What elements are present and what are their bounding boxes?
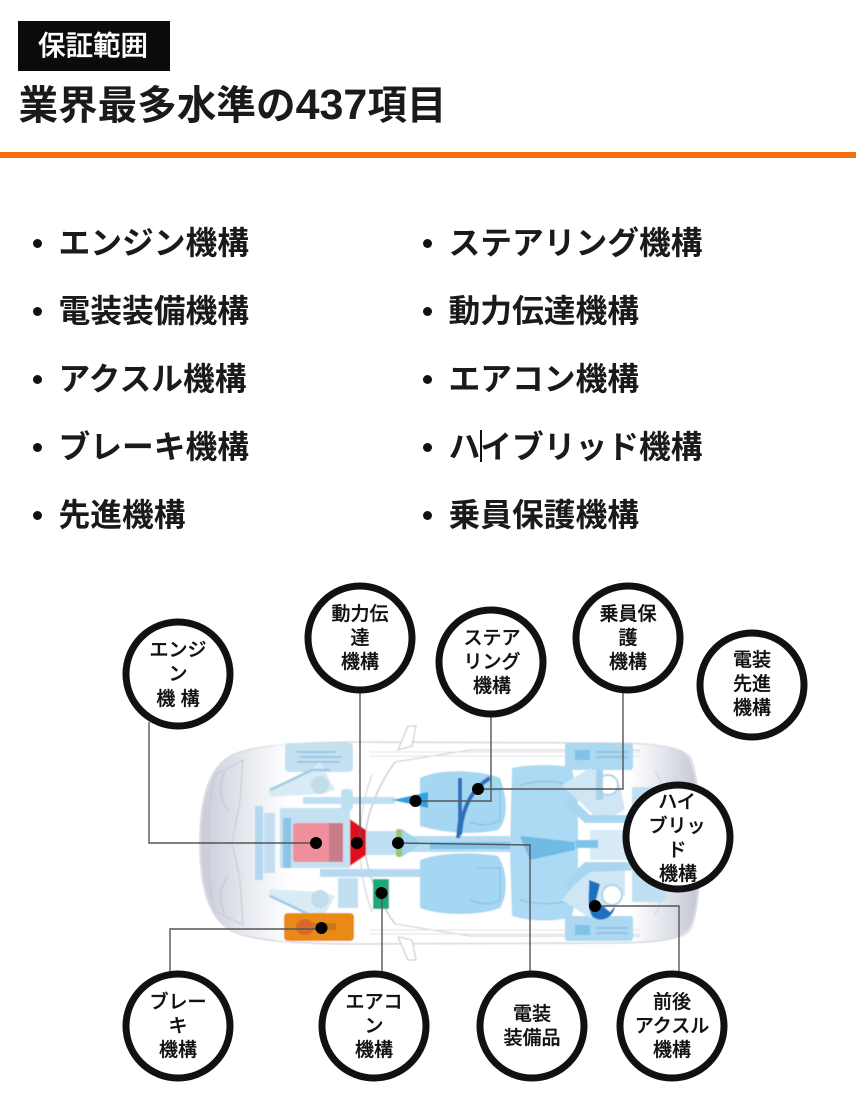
callout: 乗員保護機構 <box>576 586 680 690</box>
callout: 電装先進機構 <box>700 633 804 737</box>
badge: 保証範囲 <box>18 21 170 71</box>
callout: エアコン機構: 機構 <box>355 1039 393 1061</box>
callout: ステアリング機構: 機構 <box>473 675 511 697</box>
callout: エンジン機構 <box>126 622 230 726</box>
item: エアコン機構 <box>448 361 639 397</box>
callout: ステアリング機構: ステア <box>463 628 521 649</box>
item: 先進機構 <box>58 497 186 533</box>
item: 乗員保護機構 <box>448 497 639 533</box>
orange divider <box>0 152 856 158</box>
callout: ハイブリッド機構: 機構 <box>659 863 697 885</box>
callout: 電装装備品 <box>480 974 584 1078</box>
list: coverage items right column <box>423 225 702 533</box>
air conditioning unit <box>373 879 389 909</box>
callout: 電装先進機構: 先進 <box>733 673 771 695</box>
red drivetrain part <box>350 819 366 866</box>
callout: 動力伝達機構 <box>308 586 412 690</box>
blue mechanical parts <box>255 743 666 941</box>
callout: 電装先進機構: 機構 <box>733 697 771 719</box>
car illustration <box>200 726 700 960</box>
callout: エンジン機構: 機 構 <box>156 688 200 710</box>
item: 電装装備機構 <box>58 293 249 329</box>
item: アクスル機構 <box>58 361 246 397</box>
location markers <box>310 783 601 934</box>
callout: 乗員保護機構: 乗員保 <box>599 603 657 625</box>
blue shaft part <box>392 792 428 808</box>
car body <box>200 726 700 960</box>
callout: ハイブリッド機構: ハイ <box>658 792 696 813</box>
callout: 乗員保護機構: 機構 <box>609 651 647 673</box>
item: エンジン機構 <box>58 225 249 261</box>
callout: ブレーキ機構 <box>126 974 230 1078</box>
callout: ブレーキ機構: キ <box>168 1016 188 1037</box>
callout: 電装装備品: 電装 <box>513 1003 551 1025</box>
title: 業界最多水準の437項目 <box>18 81 446 129</box>
callout: 動力伝達機構: 機構 <box>341 651 379 673</box>
rear seat <box>510 765 578 920</box>
item: 動力伝達機構 <box>448 293 639 329</box>
callout: ステアリング機構: リング <box>463 651 521 673</box>
front seats <box>420 771 506 833</box>
callout: 電装先進機構: 電装 <box>733 649 771 671</box>
callout: 電装装備品: 装備品 <box>503 1027 561 1049</box>
item: ハイブリッド機構 <box>448 429 702 465</box>
callout: エンジン機構: ン <box>168 664 188 685</box>
callout: 動力伝達機構: 達 <box>350 627 370 649</box>
callout: ステアリング機構 <box>439 610 543 714</box>
brake unit <box>284 913 354 941</box>
callout: 前後アクスル機構 <box>620 974 724 1078</box>
callout: 前後アクスル機構: アクスル <box>635 1015 709 1037</box>
green connector <box>396 829 402 857</box>
callout: ブレーキ機構: 機構 <box>159 1039 197 1061</box>
callout: 前後アクスル機構: 機構 <box>653 1039 691 1061</box>
callout: エアコン機構 <box>322 974 426 1078</box>
item: ブレーキ機構 <box>58 429 249 465</box>
item: ステアリング機構 <box>448 225 702 261</box>
list: coverage items left column <box>33 225 249 533</box>
axle part <box>589 880 615 920</box>
engine <box>293 823 343 862</box>
callout: ハイブリッド機構: ド <box>667 840 687 861</box>
callout: ハイブリッド機構 <box>626 785 730 889</box>
rear suspension <box>565 743 633 770</box>
callout: ブレーキ機構: ブレー <box>149 990 207 1013</box>
callout: 動力伝達機構: 動力伝 <box>331 603 389 625</box>
callout: エアコン機構: ン <box>364 1016 384 1037</box>
badge: 保証範囲: 保証範囲 <box>38 30 148 61</box>
leader lines <box>149 690 679 980</box>
callout: エンジン機構: エンジ <box>149 640 207 661</box>
callout: 乗員保護機構: 護 <box>618 627 638 649</box>
steering part <box>458 778 490 838</box>
callout: ハイブリッド機構: ブリッ <box>648 814 706 837</box>
callout: 前後アクスル機構: 前後 <box>653 991 691 1013</box>
mirrors <box>398 726 416 960</box>
callout: エアコン機構: エアコ <box>345 992 403 1013</box>
